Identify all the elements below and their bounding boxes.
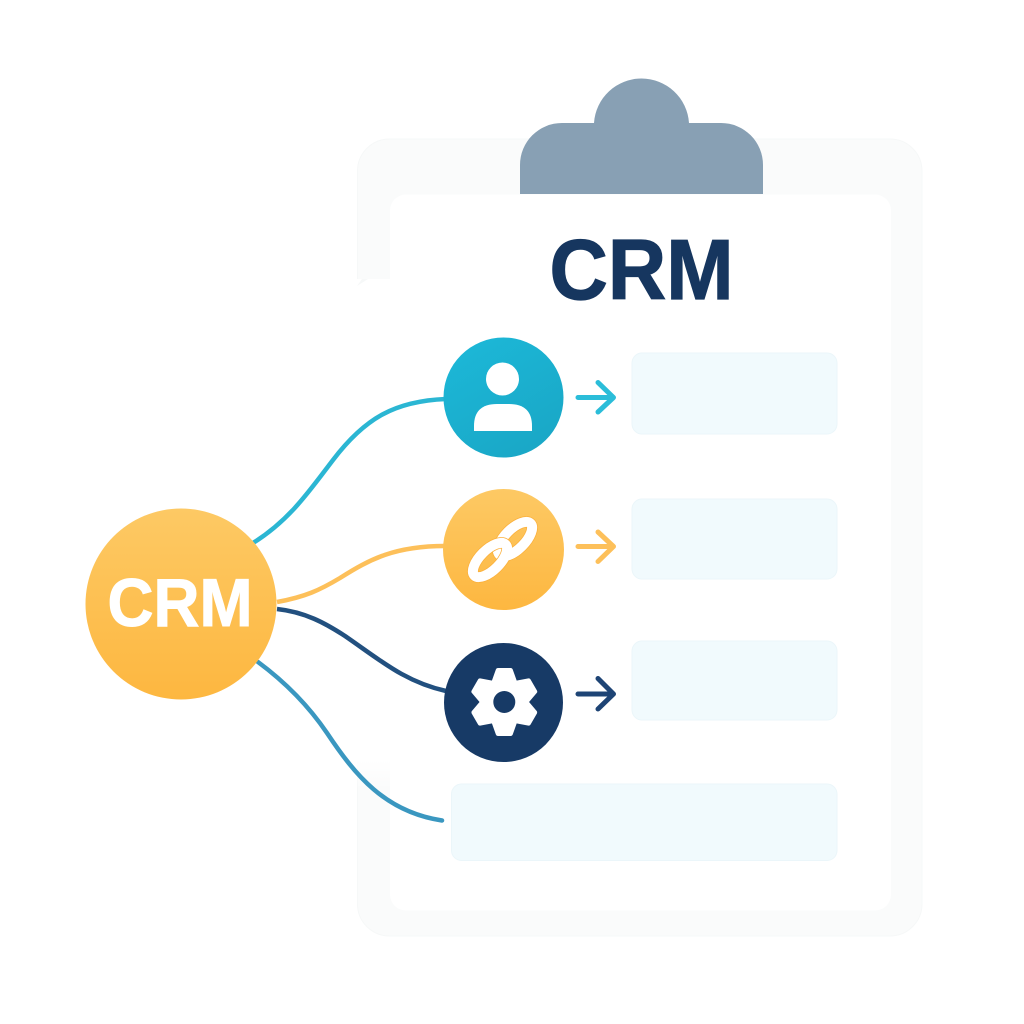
arrow: navy	[578, 678, 614, 709]
clipboard board	[350, 139, 922, 936]
icon: chain link	[443, 489, 564, 610]
arrow: teal	[578, 382, 614, 412]
field box 4	[452, 784, 837, 860]
clipboard clip	[520, 78, 763, 194]
CRM hub circle: CRM	[108, 565, 252, 641]
CRM hub circle	[86, 508, 276, 700]
field box 2	[632, 499, 837, 579]
connector: blue	[258, 662, 442, 820]
connector: navy	[277, 609, 446, 691]
arrow: orange	[578, 532, 614, 562]
field box 1	[632, 353, 837, 434]
icon: person	[444, 338, 564, 458]
field box 3	[632, 641, 837, 720]
connector: orange	[277, 546, 445, 602]
icon: gear	[444, 643, 563, 762]
title: CRM	[550, 223, 734, 318]
connector: teal	[253, 399, 446, 543]
